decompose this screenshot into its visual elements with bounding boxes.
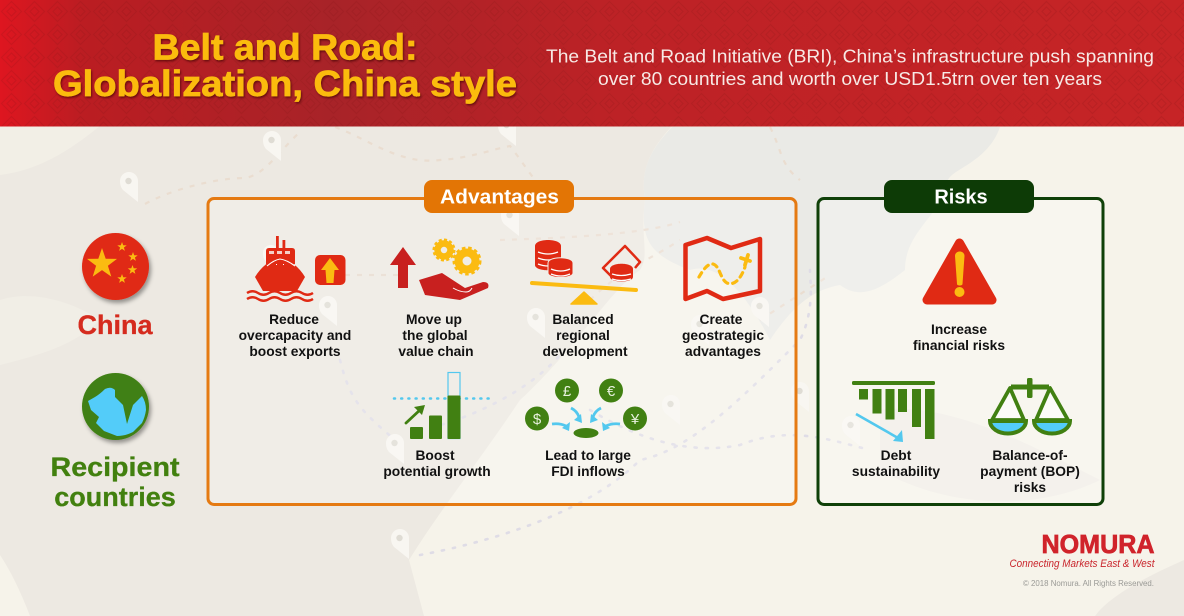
label: Lead to large: [545, 448, 631, 463]
label: Increase: [931, 322, 987, 337]
panel: advantages: [208, 180, 796, 504]
panel: risks: [818, 180, 1103, 504]
label: sustainability: [852, 464, 940, 479]
map background: [0, 126, 1184, 616]
label: boost exports: [249, 344, 341, 359]
logo: nomura: Connecting Markets East & West: [1010, 558, 1155, 570]
label: payment (BOP): [980, 464, 1080, 479]
subtitle: over 80 countries and worth over USD1.5trn over ten years: [598, 69, 1102, 89]
label: Debt: [881, 448, 912, 463]
icon: currency coins and arrows: €: [607, 383, 616, 400]
label: [852, 448, 940, 479]
item: move up value chain: [390, 240, 488, 359]
title: Globalization, China style: [53, 63, 517, 104]
label: [383, 448, 491, 479]
label: Boost: [415, 448, 455, 463]
copyright: © 2018 Nomura. All Rights Reserved.: [1023, 579, 1154, 588]
icon: currency coins and arrows: $: [533, 411, 542, 428]
label: [913, 322, 1005, 353]
label: Balanced: [552, 312, 614, 327]
heading: risks: [884, 180, 1034, 213]
label: [239, 312, 351, 359]
label: Move up: [406, 312, 462, 327]
icon: china flag: [82, 233, 149, 300]
panel: china legend: [77, 233, 153, 340]
item: debt sustainability: [852, 381, 940, 479]
subtitle: [546, 46, 1154, 89]
header banner: [0, 0, 1184, 126]
label: recipient countries: Recipient: [50, 452, 180, 482]
icon: balance scale: [990, 378, 1070, 434]
label: geostrategic: [682, 328, 764, 343]
item: FDI inflows: [525, 378, 647, 479]
item: balanced development: [532, 240, 640, 359]
icon: coin balance: [532, 240, 640, 304]
label: value chain: [398, 344, 474, 359]
label: potential growth: [383, 464, 491, 479]
icon: ship: [247, 236, 346, 301]
icon: globe: [82, 373, 149, 440]
panel: recipient countries legend: [50, 373, 180, 512]
heading: advantages: [424, 180, 574, 213]
map pins: [120, 116, 860, 559]
title: Belt and Road:: [152, 26, 418, 68]
icon: warning triangle: [927, 243, 992, 300]
label: china: China: [77, 310, 153, 340]
label: regional: [556, 328, 610, 343]
label: recipient countries: countries: [54, 482, 176, 512]
icon: treasure map: [686, 238, 760, 299]
label: FDI inflows: [551, 464, 625, 479]
label: the global: [402, 328, 468, 343]
label: [682, 312, 764, 359]
heading: risks: Risks: [934, 186, 988, 208]
heading: advantages: Advantages: [440, 186, 559, 208]
label: [398, 312, 474, 359]
label: advantages: [685, 344, 761, 359]
icon: currency coins and arrows: £: [563, 383, 572, 400]
label: recipient countries: [50, 452, 180, 512]
label: [542, 312, 628, 359]
logo: nomura: [1010, 531, 1155, 570]
label: Create: [700, 312, 743, 327]
label: Balance-of-: [992, 448, 1068, 463]
label: financial risks: [913, 338, 1005, 353]
icon: arrow, gears and hand: [390, 240, 488, 300]
label: risks: [1014, 480, 1046, 495]
label: development: [542, 344, 628, 359]
item: reduce overcapacity: [239, 236, 351, 359]
icon: bar chart with target: [394, 372, 492, 439]
label: Reduce: [269, 312, 319, 327]
title: [53, 26, 517, 104]
subtitle: The Belt and Road Initiative (BRI), China’s infrastructure push spanning: [546, 46, 1154, 66]
item: boost potential growth: [383, 372, 492, 479]
item: financial risks: [913, 243, 1005, 353]
item: BOP risks: [980, 378, 1080, 495]
icon: currency coins and arrows: [525, 378, 647, 438]
label: [545, 448, 631, 479]
item: geostrategic advantages: [682, 238, 764, 359]
trade routes: [145, 127, 870, 555]
label: [980, 448, 1080, 495]
label: overcapacity and: [239, 328, 351, 343]
logo: nomura: NOMURA: [1042, 531, 1154, 559]
icon: currency coins and arrows: ¥: [630, 411, 640, 428]
icon: declining bars: [852, 381, 935, 442]
